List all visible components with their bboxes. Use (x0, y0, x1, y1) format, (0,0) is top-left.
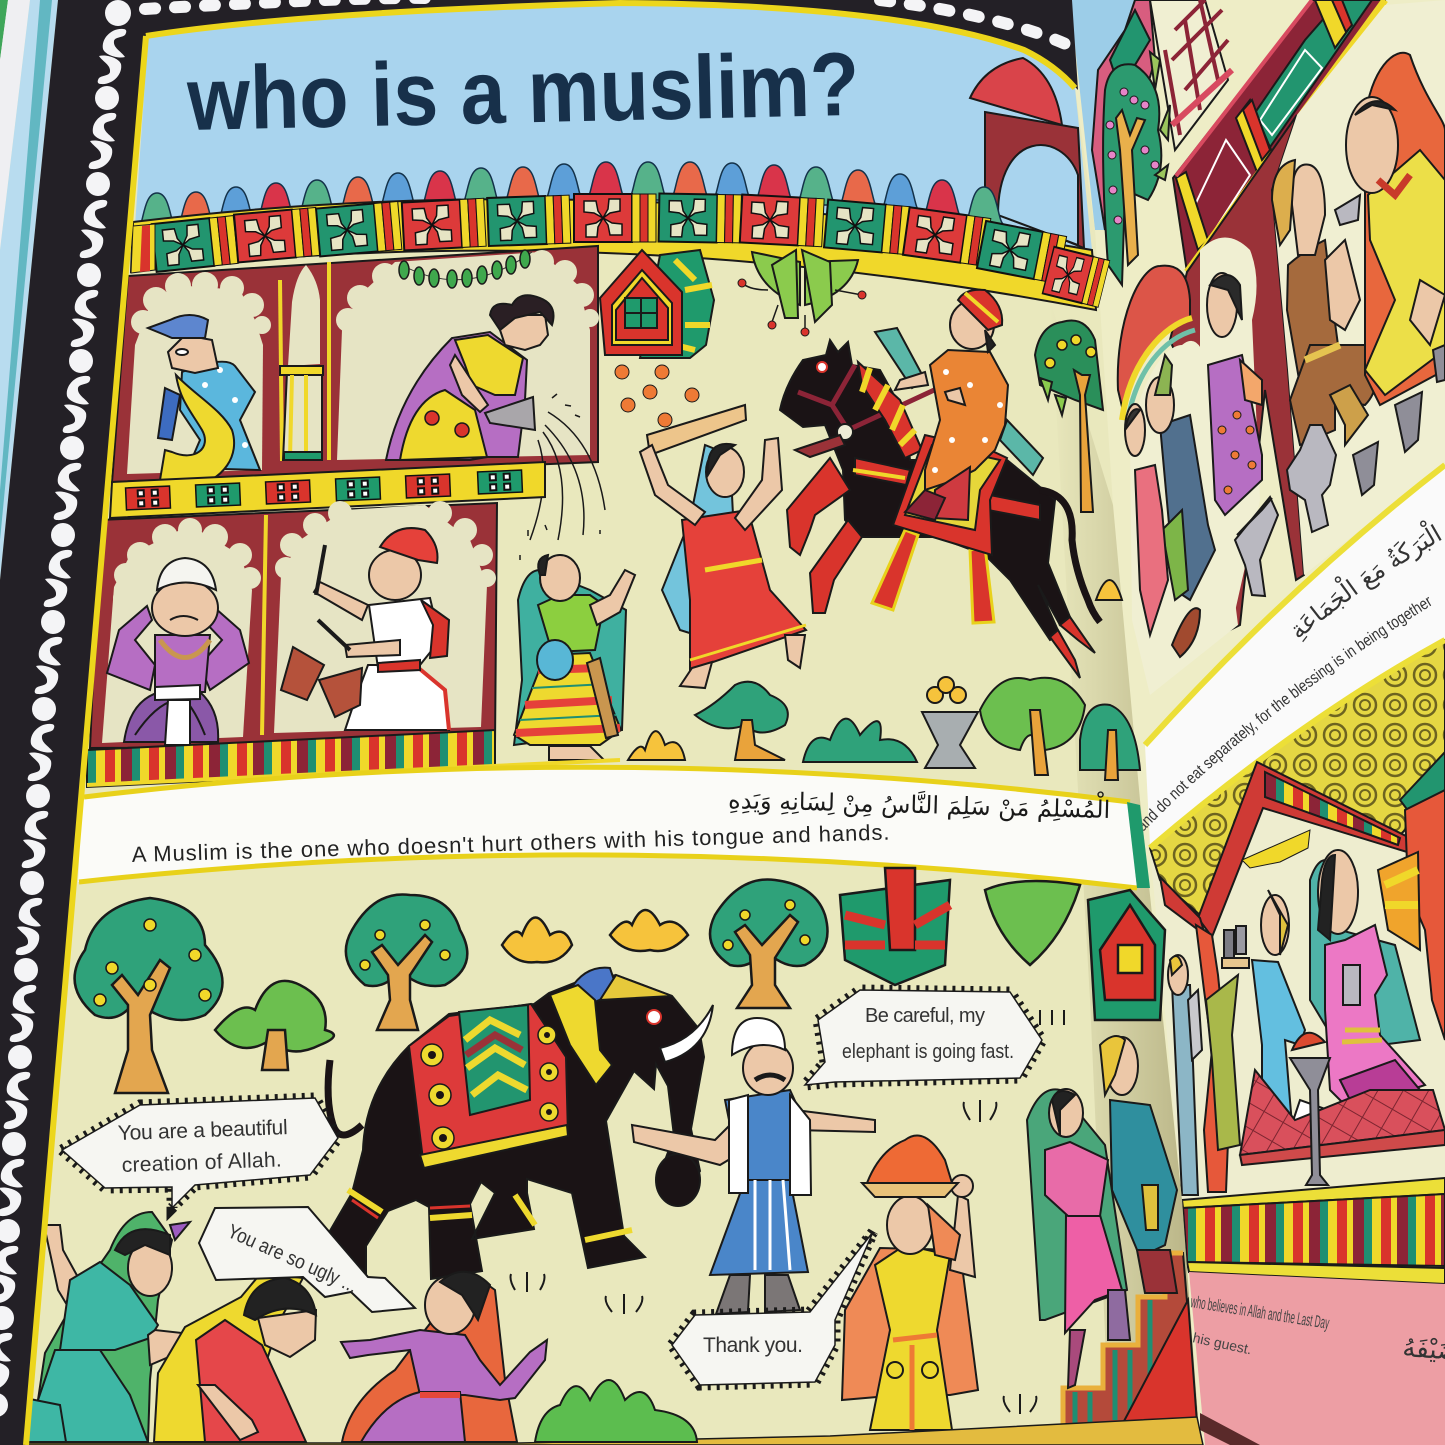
window: man with horn (127, 272, 271, 492)
title: who is a muslim? (185, 35, 860, 150)
blue scarf (662, 445, 735, 640)
icon: bowl stand (1235, 497, 1278, 596)
stairs (1063, 1253, 1197, 1427)
icon: bowl of sweets (1290, 1033, 1330, 1185)
figure: woman in purple (1207, 273, 1262, 515)
icon: domed pavilion (970, 58, 1084, 248)
arm raised (590, 570, 635, 625)
water drops and streams (520, 394, 605, 560)
head (128, 1240, 172, 1296)
purple torso and arm (341, 1330, 547, 1400)
stripe band bottom (87, 730, 495, 787)
torso (155, 635, 210, 692)
body (327, 975, 704, 1279)
forehead yellow (600, 975, 672, 1000)
stick (647, 405, 746, 455)
right page: small roofs (1092, 0, 1155, 230)
black decorative border (0, 0, 1078, 1445)
green top (538, 595, 604, 652)
horse body (780, 340, 1070, 640)
white skirt (345, 665, 449, 730)
teal pot (20, 1397, 66, 1442)
figure: person in brown (1272, 160, 1376, 445)
ornament: red green hanging (840, 868, 950, 985)
horse red legs (787, 458, 850, 555)
red dress (682, 510, 806, 670)
page bottom yellow band (24, 1417, 1203, 1445)
figure: man in blue with tray (1222, 890, 1328, 1140)
right page: arcade walls (1118, 115, 1304, 695)
pink panel (1189, 1272, 1445, 1445)
elephant (327, 968, 713, 1279)
orange column (1196, 925, 1230, 1192)
eye (647, 1010, 661, 1024)
yellow dress (870, 1245, 952, 1430)
icon: silver vase (1287, 425, 1336, 532)
tail (1040, 490, 1100, 622)
feet (549, 746, 604, 760)
orange shawl (842, 1248, 978, 1400)
right page illustration (1070, 0, 1445, 695)
window: old man covering ears (102, 518, 261, 745)
striped skirt (514, 653, 621, 745)
small tree (1080, 704, 1140, 780)
raised arm (44, 1225, 85, 1310)
large window background (1272, 0, 1445, 575)
scroll pattern canopy (1150, 640, 1445, 915)
trunk tip (656, 1154, 700, 1206)
teal blouse (60, 1262, 158, 1350)
head (706, 447, 744, 497)
leg (933, 467, 970, 520)
couple at right of lower scene (1027, 1036, 1197, 1427)
yellow horn (158, 375, 234, 492)
tree 2 (346, 894, 467, 1030)
teal veil (514, 570, 626, 745)
saddle cloth (409, 1004, 568, 1168)
leaf icon yellow (628, 731, 685, 760)
frieze tiles (152, 193, 1110, 307)
hair (244, 1278, 316, 1320)
white top (369, 598, 440, 668)
teal skirt (35, 1350, 148, 1442)
arm with stick (314, 582, 368, 620)
speech bubble: so ugly (199, 1207, 415, 1312)
woman with water pot (514, 555, 635, 760)
scalloped hills (136, 162, 1005, 231)
yellow veil (154, 1273, 303, 1442)
lower scene trees and plants (75, 868, 1165, 1093)
anklets (348, 1190, 632, 1240)
small grass tufts (510, 1010, 1064, 1414)
arm and reins (895, 372, 928, 390)
bubble text line 2: elephant is going fast. (842, 1041, 1014, 1063)
arm (950, 1195, 975, 1277)
sweets stand (922, 677, 978, 768)
saddle cloth (893, 435, 1007, 555)
hand (951, 1175, 973, 1197)
grass plant (803, 719, 917, 762)
sky panel (135, 3, 1092, 250)
window: woman pouring water (336, 250, 599, 460)
speech bubble: be careful (805, 990, 1042, 1085)
gutter shadow (1050, 300, 1200, 1445)
figure: woman in yellow with orange veil (1335, 53, 1445, 405)
mane stripes (858, 362, 922, 458)
water bowl (485, 397, 535, 430)
white scroll pattern top (145, 0, 1068, 45)
left stripes of frieze (131, 224, 155, 273)
upper building with windows (112, 246, 599, 492)
feet (680, 635, 805, 688)
head (887, 1196, 933, 1254)
speech bubble: thank you (672, 1232, 873, 1385)
tan strip (587, 658, 618, 738)
white scroll pattern left (0, 0, 131, 1417)
red sash (421, 600, 449, 658)
lower building with windows (87, 462, 620, 787)
tree 3 (710, 879, 828, 1008)
shrub (695, 682, 788, 760)
turban (380, 528, 438, 563)
orange veil (342, 1272, 517, 1442)
tail (328, 1060, 362, 1135)
figure: woman in pink sitting (1310, 850, 1425, 1110)
blouse (455, 335, 523, 395)
leaf plant top (738, 250, 866, 336)
decorated pillar (1378, 790, 1445, 1040)
head (425, 1276, 475, 1334)
purple sari (386, 332, 527, 460)
arm on belly (198, 1385, 258, 1440)
bottom left women group (20, 1212, 547, 1442)
head (152, 580, 218, 636)
Arabic quote: الْبَرَكَةُ مَعَ الْجَمَاعَةِ (1293, 520, 1442, 642)
small yellow leaf (1096, 580, 1122, 600)
English translation: A Muslim is the one who doesn't hurt others with his tongue and hands. (131, 820, 890, 867)
sweets (867, 1136, 952, 1183)
icon: flowering tree (1103, 52, 1170, 285)
red dress (196, 1320, 306, 1442)
head (168, 335, 218, 373)
right page: lattice balcony (1150, 0, 1232, 150)
pink panel second line: his guest. (1191, 1329, 1253, 1357)
white belt (155, 685, 200, 745)
decorated band upper (110, 462, 545, 518)
decorated frieze band (131, 193, 1110, 310)
Arabic quote: الْمُسْلِمُ مَنْ سَلِمَ النَّاسُ مِنْ لِسَانِهِ وَيَدِهِ (728, 781, 1111, 824)
hair leaf (170, 1222, 190, 1240)
figure: old man in grey robes (1146, 355, 1215, 600)
figure: small man (1168, 955, 1202, 1195)
window: drummer (274, 501, 496, 733)
yellow leaves (502, 918, 572, 962)
big leaf (985, 881, 1080, 965)
girl with stick (640, 405, 806, 688)
right page: quote strip (1142, 462, 1445, 844)
head (369, 550, 421, 600)
blue cap (570, 968, 618, 1004)
yellow skirt (400, 390, 487, 460)
bottom plants row upper (628, 580, 1140, 780)
yellow page frame (26, 3, 1075, 1445)
rider weapons (875, 328, 925, 388)
green woman (20, 1212, 200, 1442)
bubble text: You are so ugly ... (224, 1220, 361, 1298)
icon: plate of meat (1172, 608, 1200, 657)
garland (402, 252, 532, 280)
arm (450, 355, 488, 412)
woman with sweet basket (842, 1136, 978, 1430)
tree right of horse (1035, 320, 1103, 512)
tree 1 (75, 898, 222, 1093)
arms (640, 445, 705, 525)
rider head (950, 301, 994, 349)
orange balls (615, 365, 699, 427)
saddle straps (872, 530, 918, 610)
pink top (1045, 1142, 1108, 1216)
purple woman (341, 1272, 547, 1442)
face (258, 1310, 316, 1357)
English quote: and do not eat separately, for the blessing is in being together (1142, 596, 1432, 831)
figure: woman in pink (1125, 404, 1168, 635)
sky sliver (1070, 0, 1150, 230)
icon: decorated hut (600, 250, 714, 358)
arms (107, 606, 155, 690)
red woman (154, 1273, 316, 1442)
purple skirt (361, 1392, 465, 1442)
bottom plant (535, 1380, 697, 1442)
drums (281, 647, 324, 700)
bubble text: Be careful, my (865, 1005, 985, 1027)
bubble text: Thank you. (703, 1334, 803, 1357)
table (1240, 1070, 1445, 1165)
tusks (660, 1005, 713, 1062)
eye and bridle (817, 362, 827, 372)
right page: decorated band (1173, 0, 1385, 272)
bubble text line 2: creation of Allah. (121, 1148, 282, 1177)
blue scarf (158, 388, 180, 440)
ear (550, 985, 612, 1085)
figure: servant in olive (1206, 975, 1240, 1150)
head (1049, 1089, 1083, 1137)
canopy beams (1160, 752, 1445, 937)
decorated hut (1088, 890, 1165, 1020)
man in blue stripes (1110, 1100, 1177, 1257)
chest band (855, 458, 910, 485)
speech bubble: beautiful creation (62, 1098, 338, 1208)
legs (1068, 1330, 1085, 1388)
man with moustache (632, 1018, 875, 1314)
red belt (378, 660, 420, 672)
rider robe (925, 350, 1008, 490)
shrub (215, 981, 334, 1070)
pink skirt (1065, 1215, 1122, 1333)
large plant (980, 678, 1085, 775)
red necklace and belt (420, 1392, 460, 1398)
stripe band (1182, 1178, 1445, 1284)
head looking up (540, 555, 580, 601)
water pot (537, 640, 573, 680)
skirt with stripes (124, 692, 218, 742)
head (500, 315, 548, 350)
tray (862, 1183, 958, 1197)
man robe (180, 362, 260, 470)
horse with rider (780, 290, 1100, 678)
arm to shoulder (148, 1330, 200, 1365)
quote banner (78, 767, 1150, 888)
icon: cups (1353, 345, 1445, 495)
right page: lower scene (1150, 640, 1445, 1445)
green veil (38, 1212, 172, 1442)
bubble text: You are a beautiful (117, 1116, 288, 1145)
green veil (1027, 1089, 1127, 1320)
window: narrow arch (280, 262, 329, 461)
